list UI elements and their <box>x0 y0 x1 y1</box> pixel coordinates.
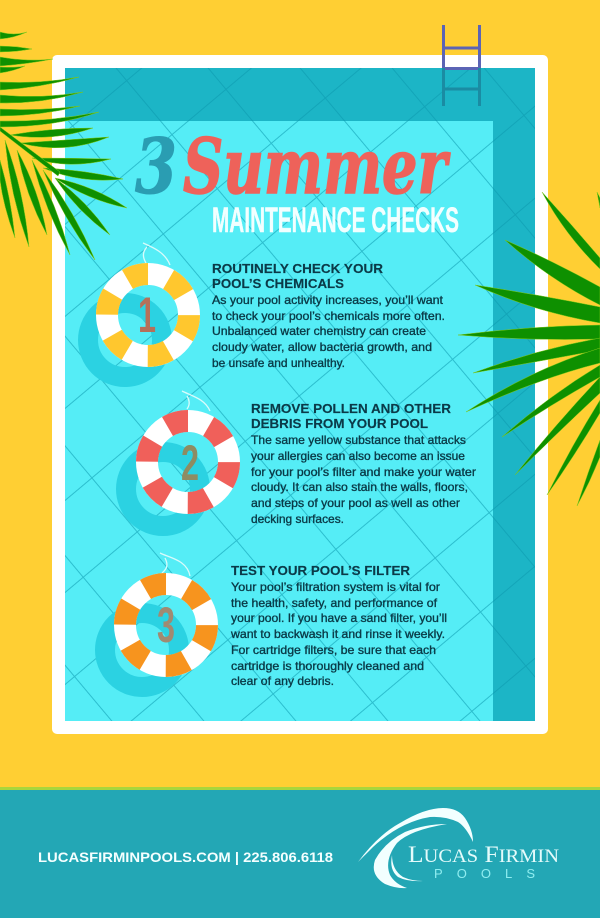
body text: For cartridge filters, be sure that each <box>231 643 436 657</box>
footer contact text: LUCASFIRMINPOOLS.COM | 225.806.6118 <box>38 849 333 865</box>
icon: pool ladder <box>444 25 480 106</box>
heading: POOL’S CHEMICALS <box>212 276 344 291</box>
icon: swim ring 1 <box>88 243 204 377</box>
body text: Unbalanced water chemistry can create <box>212 324 426 338</box>
body text: the health, safety, and performance of <box>231 596 438 610</box>
body text <box>212 293 445 370</box>
icon: swim ring 3: 3 <box>157 597 175 653</box>
body text: The same yellow substance that attacks <box>251 433 466 447</box>
body text: to check your pool’s chemicals more often. <box>212 309 445 323</box>
body text: want to backwash it and rinse it weekly. <box>230 627 445 641</box>
icon: swim ring 2: 2 <box>181 435 199 491</box>
body text: and steps of your pool as well as other <box>251 496 460 510</box>
body text: cartridge is thoroughly cleaned and <box>231 659 424 673</box>
icon: swim ring 3 <box>105 553 222 687</box>
icon: palm frond left <box>0 32 127 260</box>
body text: Your pool’s filtration system is vital for <box>231 580 440 594</box>
footer band <box>0 787 600 918</box>
body text: clear of any debris. <box>231 674 334 688</box>
body text: As your pool activity increases, you’ll want <box>212 293 444 307</box>
panel: check 1 <box>88 243 445 377</box>
icon: swim ring 2 <box>126 391 244 526</box>
logo swoosh <box>358 808 473 888</box>
body text: cloudy. It can also stain the walls, floors, <box>251 480 468 494</box>
logo subtitle: POOLS <box>434 866 535 881</box>
panel: check 3 <box>105 553 447 688</box>
panel: check 2 <box>126 391 476 526</box>
icon: palm frond right <box>458 192 600 506</box>
body text: your allergies can also become an issue <box>251 449 465 463</box>
title number: 3 <box>135 122 177 211</box>
heading <box>212 261 384 291</box>
title word: Summer: Summer <box>183 122 451 211</box>
logo <box>358 808 559 888</box>
body text <box>230 580 447 688</box>
body text: for your pool’s filter and make your water <box>251 465 476 479</box>
heading <box>251 401 452 431</box>
heading: TEST YOUR POOL’S FILTER <box>231 563 411 578</box>
icon: swim ring 1: 1 <box>138 287 156 343</box>
panel: pool <box>52 55 548 734</box>
heading: ROUTINELY CHECK YOUR <box>212 261 384 276</box>
body text: be unsafe and unhealthy. <box>212 356 345 370</box>
body text <box>251 433 476 526</box>
body text: decking surfaces. <box>251 512 344 526</box>
body text: cloudy water, allow bacteria growth, and <box>212 340 432 354</box>
heading: REMOVE POLLEN AND OTHER <box>251 401 452 416</box>
body text: your pool. If you have a sand filter, you’ll <box>231 611 447 625</box>
logo wordmark: LUCAS FIRMIN <box>408 842 559 867</box>
heading: DEBRIS FROM YOUR POOL <box>251 416 428 431</box>
title <box>135 122 459 240</box>
